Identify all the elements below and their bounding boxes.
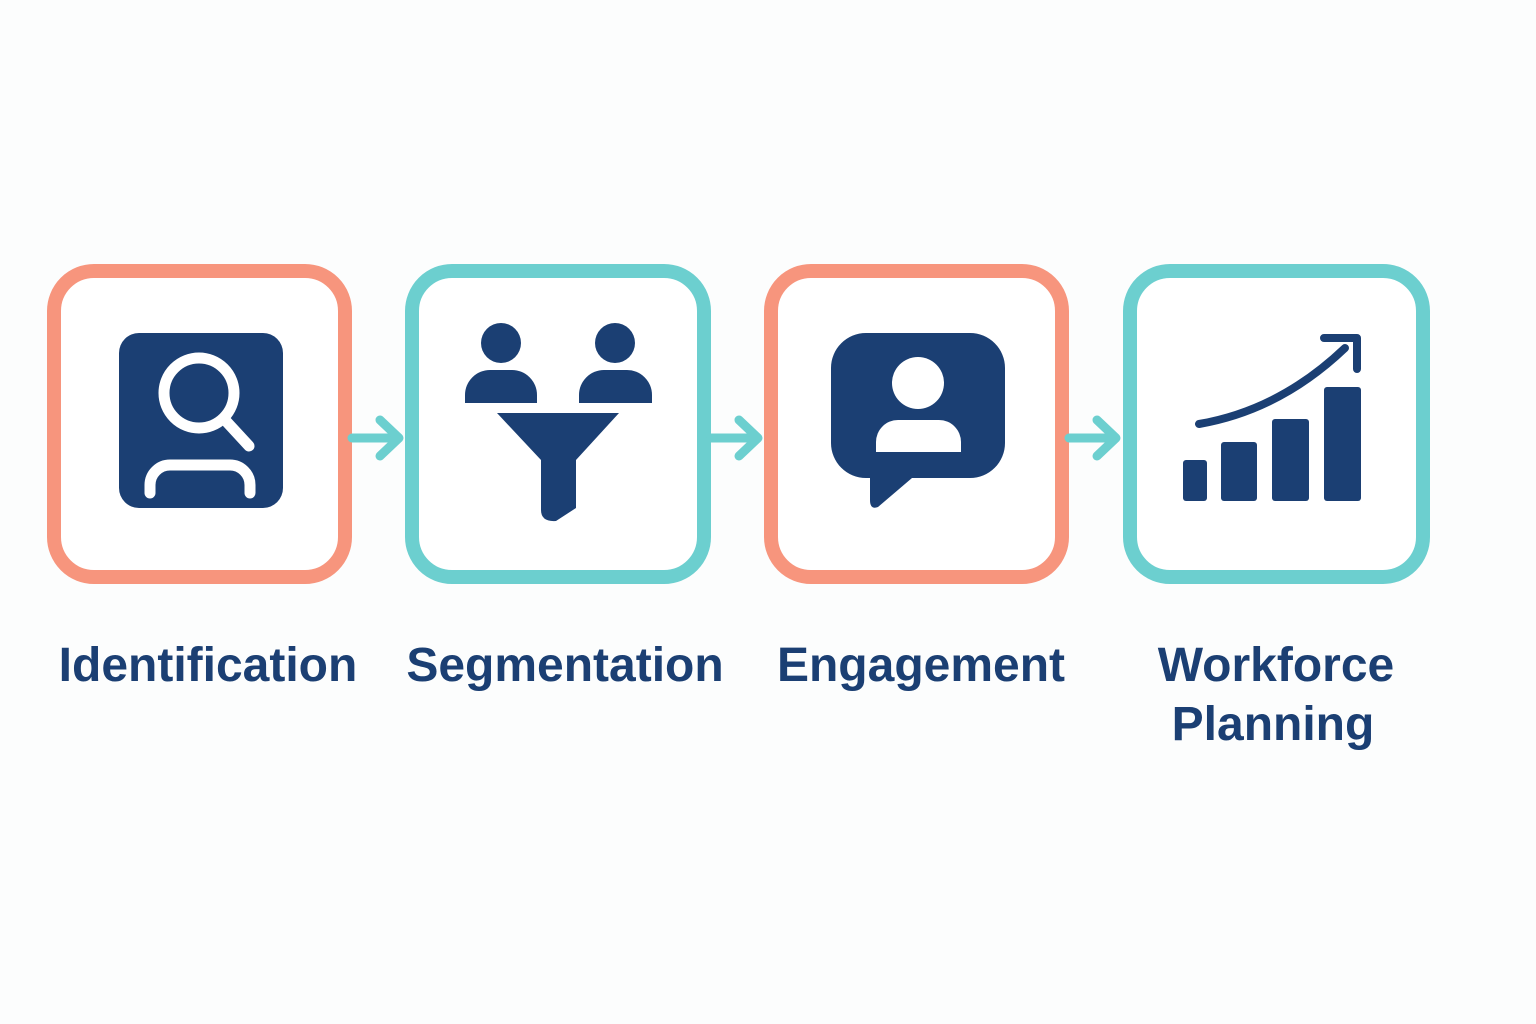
label: Engagement: Engagement bbox=[777, 639, 1065, 692]
label: Segmentation: Segmentation bbox=[406, 639, 724, 692]
panel: Engagement bbox=[771, 271, 1062, 577]
label: Workforce Planning: Planning bbox=[1172, 698, 1374, 751]
icon: people funnel bbox=[465, 323, 652, 521]
label: Workforce Planning: Workforce bbox=[1158, 639, 1394, 692]
arrow 1 bbox=[352, 420, 399, 456]
label: Identification: Identification bbox=[59, 639, 357, 692]
icon: growth chart bbox=[1183, 338, 1361, 501]
arrow 2 bbox=[711, 420, 758, 456]
icon: chat user bbox=[831, 333, 1005, 508]
icon: user search bbox=[119, 333, 283, 508]
panel: Identification bbox=[54, 271, 345, 577]
panel: Workforce Planning bbox=[1130, 271, 1423, 577]
panel: Segmentation bbox=[412, 271, 704, 577]
arrow 3 bbox=[1069, 420, 1116, 456]
